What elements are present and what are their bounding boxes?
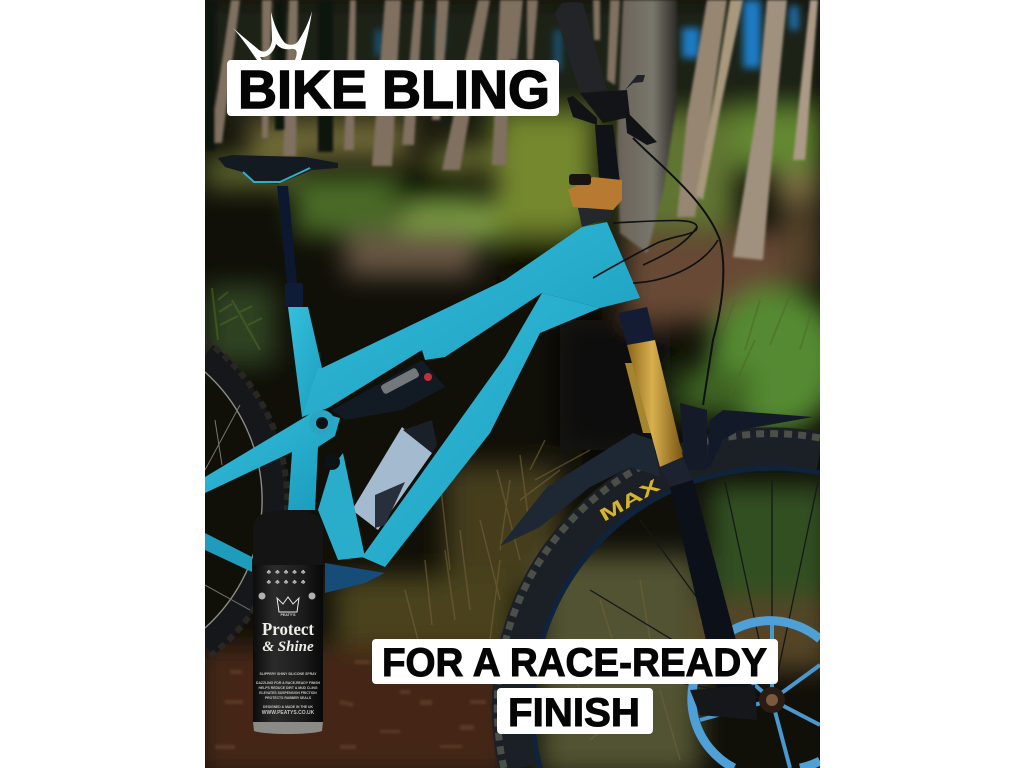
can crown logo: [277, 597, 299, 612]
top tube: [302, 222, 640, 417]
can small print: [256, 672, 321, 716]
can subtitle: & Shine: [262, 639, 314, 655]
can small print: DAZZLING FOR A RACE-READY FINISH: [256, 681, 321, 685]
ground texture: [215, 660, 486, 749]
crown logo outline: [233, 11, 312, 60]
sky glimpses: [376, 0, 798, 70]
frame pivot: [309, 410, 333, 428]
bottom bracket: [325, 563, 385, 593]
can pattern rows: [266, 570, 306, 584]
cockpit: stem, clamp, handlebar: [555, 2, 723, 405]
can small print: ELEVATES SUSPENSION FRICTION: [259, 691, 317, 695]
forest background: [200, 0, 841, 768]
caption line 1: FOR A RACE-READY: FOR A RACE-READY: [382, 641, 767, 685]
seat post and saddle: [218, 155, 338, 307]
fork: [618, 307, 757, 720]
rear wheel: [205, 340, 287, 660]
can badges: [258, 592, 316, 600]
spray can: Protect & Shine: [253, 510, 323, 734]
photo panel: bike in forest: [200, 0, 841, 768]
can small print: HELPS REDUCE DIRT & MUD CLING: [259, 686, 318, 690]
can title: Protect: [262, 619, 314, 639]
brake disc: [692, 621, 820, 768]
bike frame: [205, 222, 640, 593]
can pattern rows: ♣♣♣♣♣: [267, 569, 309, 576]
dry grass stalks: [405, 440, 720, 760]
can pattern rows: ♣♣♣♣♣: [267, 579, 309, 586]
can small print: WWW.PEATYS.CO.UK: [262, 710, 315, 716]
can small print: PROTECTS RUBBER SEALS: [265, 696, 312, 700]
heading: BIKE BLING: BIKE BLING: [238, 60, 550, 120]
rear shock: [332, 360, 445, 420]
tire brand text: MAX: [596, 475, 663, 525]
rear stays: [205, 411, 340, 510]
fender: [500, 403, 813, 546]
seat tube: [288, 307, 322, 417]
tree trunks: [205, 0, 818, 260]
bottle: [352, 420, 437, 530]
front tire: [497, 434, 820, 768]
can small print: SLIPPERY SHINY SILICONE SPRAY: [259, 672, 317, 676]
down tube: [362, 293, 600, 567]
front wheel spokes: [590, 480, 818, 698]
can small print: DESIGNED & MADE IN THE UK: [263, 705, 314, 709]
brand: PEATY'S: [281, 613, 296, 617]
caption line 2: FINISH: FINISH: [508, 691, 640, 735]
fern details: [211, 288, 810, 376]
